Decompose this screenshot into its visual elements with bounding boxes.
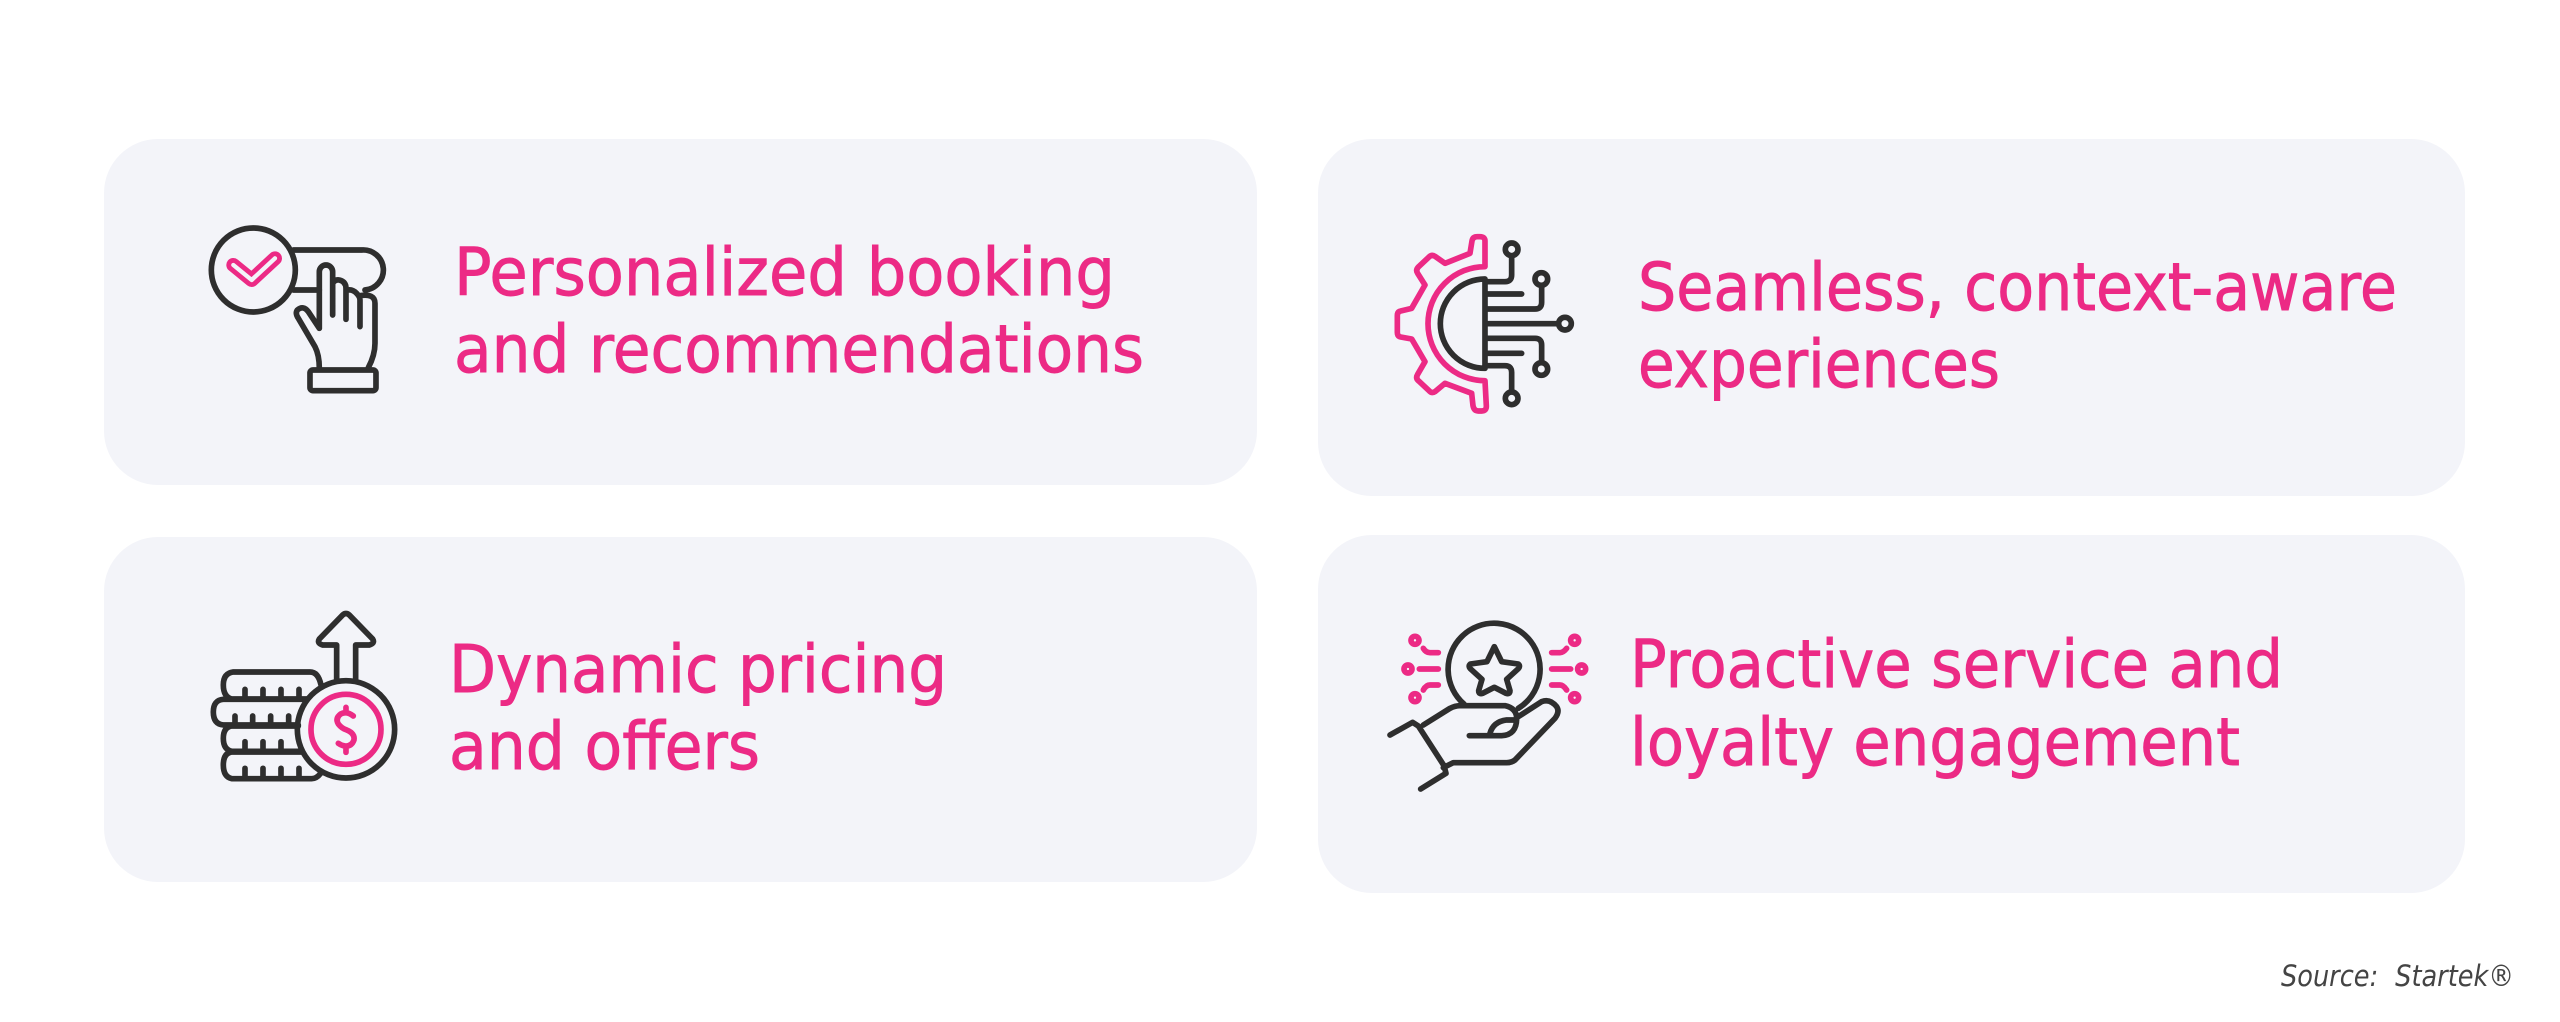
icon: coins and rising arrow: [213, 613, 395, 779]
heading: context-aware experiences: Seamless, context-aware: [1638, 249, 2397, 326]
panel: personalized booking: [104, 139, 1257, 485]
panel: context-aware experiences: [1318, 139, 2465, 496]
heading: context-aware experiences: experiences: [1638, 326, 2000, 403]
panel: dynamic pricing: [104, 537, 1257, 882]
heading: proactive service: loyalty engagement: [1630, 704, 2240, 781]
heading: dynamic pricing: Dynamic pricing: [449, 631, 947, 708]
icon: hand pressing check toggle: [211, 228, 383, 391]
icon: hand holding star: [1390, 623, 1586, 789]
heading: dynamic pricing: and offers: [449, 708, 760, 785]
source note: Source: Startek®: [2281, 959, 2514, 993]
icon: half gear with circuit: [1397, 237, 1571, 411]
panel: proactive service: [1318, 535, 2465, 893]
heading: personalized booking: Personalized booking: [454, 234, 1115, 311]
heading: personalized booking: and recommendations: [454, 311, 1144, 388]
heading: proactive service: Proactive service and: [1630, 626, 2283, 703]
